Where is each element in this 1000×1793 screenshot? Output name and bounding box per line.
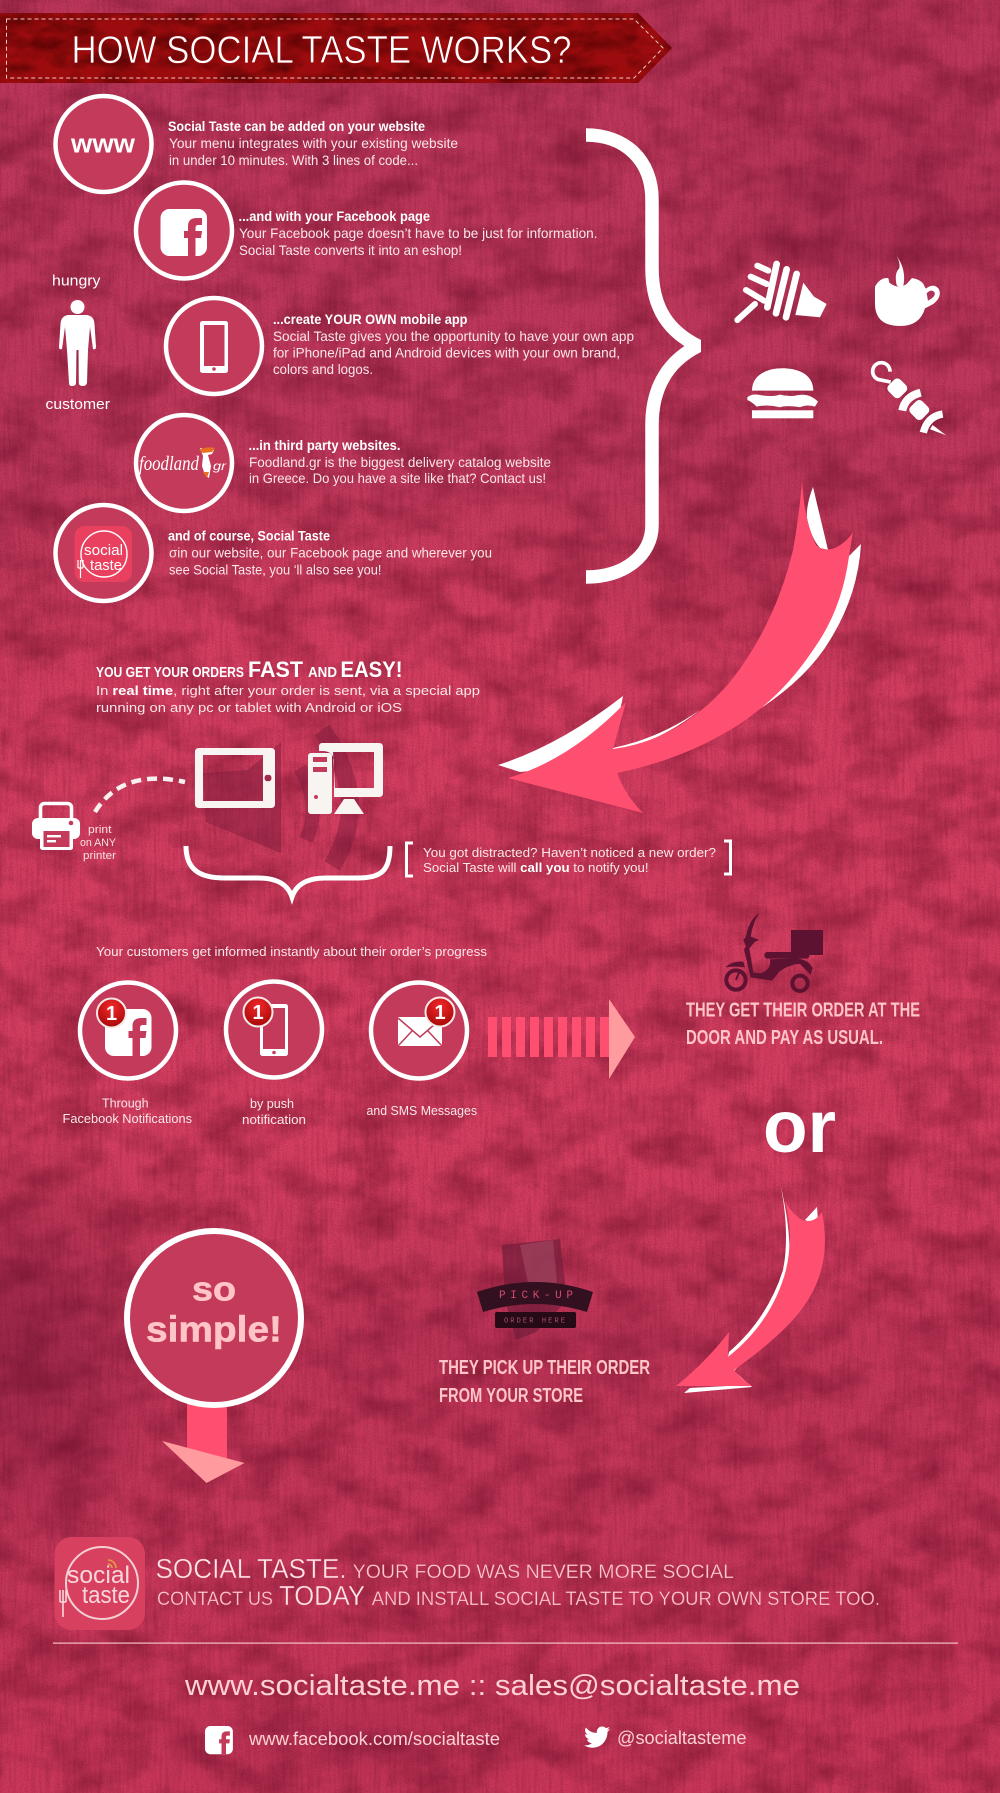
social taste description: see Social Taste, you ‘ll also see you! xyxy=(169,562,382,578)
social taste description: and of course, Social Taste xyxy=(168,528,330,544)
channel: website xyxy=(56,96,458,192)
facebook description: Your Facebook page doesn’t have to be just for information. xyxy=(239,225,598,241)
footer tagline xyxy=(156,1553,880,1611)
notification: facebook: Facebook Notifications xyxy=(62,1111,192,1126)
pick-up sign icon xyxy=(477,1239,593,1340)
facebook description: Social Taste converts it into an eshop! xyxy=(239,242,462,258)
title text: HOW SOCIAL TASTE WORKS? xyxy=(72,29,572,72)
small pink curved arrow xyxy=(676,1187,825,1393)
icon: printer xyxy=(32,804,80,850)
website description xyxy=(168,118,458,168)
pick-up caption xyxy=(439,1357,650,1407)
arrow white highlights xyxy=(498,487,861,772)
mobile app description: colors and logos. xyxy=(273,361,373,377)
icon: phone circle xyxy=(166,298,262,394)
social taste description xyxy=(168,528,492,578)
icon: social taste logo circle: taste xyxy=(90,557,122,574)
third party description: Foodland.gr is the biggest delivery catalog website xyxy=(249,454,551,470)
delivery caption xyxy=(686,1000,920,1049)
channel: facebook xyxy=(136,182,598,278)
facebook link: www.facebook.com/socialtaste xyxy=(248,1729,500,1749)
small arrow white highlights xyxy=(684,1187,818,1393)
footer tagline: SOCIAL TASTE. xyxy=(156,1553,346,1584)
bracketed call notification note: You got distracted? Haven’t noticed a new order? xyxy=(423,845,716,860)
orders heading xyxy=(96,657,402,682)
footer divider xyxy=(53,1642,958,1644)
footer tagline: YOUR FOOD WAS NEVER MORE SOCIAL xyxy=(353,1562,734,1583)
channel: social taste xyxy=(56,505,492,601)
pick-up sign icon: ORDER HERE xyxy=(504,1318,565,1326)
orders heading: AND xyxy=(308,665,337,681)
customers informed heading: Your customers get informed instantly about their order’s progress xyxy=(96,944,488,959)
print caption xyxy=(80,824,117,862)
footer tagline: TODAY xyxy=(279,1580,365,1611)
print caption: printer xyxy=(83,850,116,862)
third party description: in Greece. Do you have a site like that? Contact us! xyxy=(249,470,546,486)
notification: push: 1 xyxy=(252,1002,264,1024)
callout text xyxy=(146,1270,282,1350)
icon: honey dipper xyxy=(737,264,827,320)
footer tagline: AND INSTALL SOCIAL TASTE TO YOUR OWN STORE TOO. xyxy=(372,1589,880,1610)
icon: coffee cup xyxy=(875,256,940,326)
mobile app description: Social Taste gives you the opportunity to have your own app xyxy=(273,328,634,344)
delivery caption: THEY GET THEIR ORDER AT THE xyxy=(686,1000,920,1022)
hungry customer figure: hungry xyxy=(52,272,101,290)
callout arrow xyxy=(162,1400,244,1483)
icon: delivery scooter xyxy=(726,913,823,991)
food icons xyxy=(737,256,946,435)
notification: facebook xyxy=(62,982,192,1126)
hungry customer figure xyxy=(46,272,110,413)
icon: tablet xyxy=(195,748,275,808)
facebook link xyxy=(205,1726,500,1754)
channel: mobile app xyxy=(166,298,634,394)
arrow body xyxy=(508,480,853,813)
orders description: In real time , right after your order is sent, via a special app xyxy=(96,683,480,698)
footer logo: taste xyxy=(82,1582,130,1609)
speaker silhouette xyxy=(203,730,350,866)
mobile app description xyxy=(273,311,634,377)
large curly brace xyxy=(586,135,698,577)
or: or xyxy=(763,1085,836,1168)
print caption: on ANY xyxy=(80,837,117,849)
icon: kebab skewer xyxy=(873,363,946,435)
small arrow body xyxy=(676,1200,825,1386)
mobile app description: ...create YOUR OWN mobile app xyxy=(273,311,468,327)
third party description: ...in third party websites. xyxy=(248,437,400,453)
callout text: simple! xyxy=(146,1308,282,1350)
delivery caption: DOOR AND PAY AS USUAL. xyxy=(686,1027,883,1049)
big pink curved arrow xyxy=(498,480,861,813)
notification: sms xyxy=(366,982,477,1118)
orders description xyxy=(96,683,480,715)
channel: third party websites xyxy=(136,415,551,511)
callout circle xyxy=(127,1231,301,1405)
facebook description xyxy=(238,208,598,258)
icon: foodland circle: foodland xyxy=(139,453,200,475)
icon: social taste logo circle xyxy=(56,505,152,601)
mobile app description: for iPhone/iPad and Android devices with your own brand, xyxy=(273,344,620,360)
website description: in under 10 minutes. With 3 lines of code... xyxy=(169,152,418,168)
notification: sms: 1 xyxy=(434,1002,446,1024)
pick-up caption: THEY PICK UP THEIR ORDER xyxy=(439,1357,650,1379)
notification: push: notification xyxy=(242,1112,306,1127)
notification: sms: and SMS Messages xyxy=(366,1103,477,1118)
notification: facebook: 1 xyxy=(106,1003,117,1025)
third party description xyxy=(248,437,551,486)
footer tagline: CONTACT US xyxy=(157,1589,273,1610)
icon: www circle: www xyxy=(70,128,136,158)
notification: push xyxy=(226,982,322,1127)
icon: facebook circle xyxy=(136,182,232,278)
icon: social taste logo circle: social xyxy=(84,542,123,559)
small curly brace xyxy=(186,846,390,897)
orders description: running on any pc or tablet with Android or iOS xyxy=(96,700,402,715)
orders heading: YOU GET YOUR ORDERS xyxy=(96,665,244,681)
striped arrow xyxy=(488,999,635,1079)
website description: Social Taste can be added on your website xyxy=(168,118,425,134)
icon: foodland circle: gr xyxy=(213,459,227,473)
icon: foodland circle xyxy=(136,415,232,511)
bracketed call notification note: Social Taste will call you to notify you! xyxy=(423,860,649,875)
print caption: print xyxy=(88,824,112,836)
footer logo xyxy=(54,1537,145,1630)
orders heading: EASY! xyxy=(340,657,402,682)
website description: Your menu integrates with your existing website xyxy=(169,135,458,151)
notification: push: by push xyxy=(250,1096,294,1111)
pick-up sign icon: PICK-UP xyxy=(499,1290,573,1302)
twitter link: @socialtasteme xyxy=(617,1728,746,1748)
so simple callout with arrow xyxy=(127,1231,301,1483)
icon: www circle xyxy=(56,96,152,192)
hungry customer figure: customer xyxy=(46,396,110,413)
social taste description: σin our website, our Facebook page and wherever you xyxy=(169,544,492,560)
callout text: so xyxy=(192,1270,236,1308)
notification: facebook: Through xyxy=(102,1096,149,1110)
icon: burger xyxy=(747,368,818,418)
facebook description: ...and with your Facebook page xyxy=(238,208,430,224)
icon: desktop computer xyxy=(308,743,383,814)
footer logo: social xyxy=(67,1562,130,1589)
dashed print line xyxy=(95,779,185,812)
title banner xyxy=(0,13,672,83)
bracketed call notification note xyxy=(406,841,730,876)
contact line: www.socialtaste.me :: sales@socialtaste.me xyxy=(184,1670,800,1702)
orders heading: FAST xyxy=(248,657,304,682)
pick-up caption: FROM YOUR STORE xyxy=(439,1385,583,1407)
